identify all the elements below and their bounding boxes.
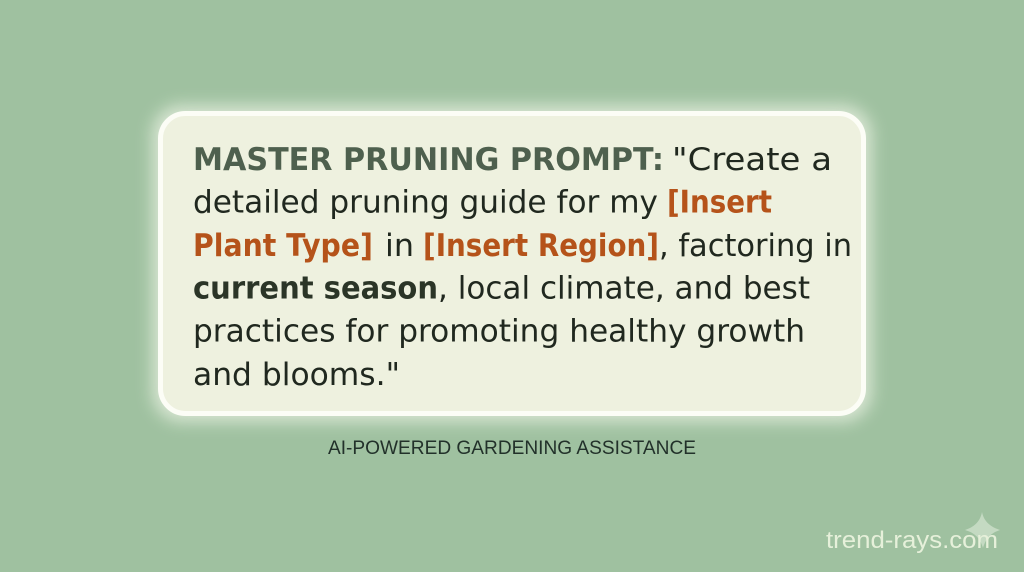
prompt text: and blooms." bbox=[193, 357, 400, 393]
prompt text: detailed pruning guide for my bbox=[193, 184, 658, 220]
prompt text: Plant Type] bbox=[193, 228, 373, 264]
caption: AI-POWERED GARDENING ASSISTANCE bbox=[328, 438, 696, 459]
prompt text: current season bbox=[193, 270, 438, 306]
prompt text: [Insert Region] bbox=[423, 228, 659, 264]
prompt card bbox=[160, 114, 864, 414]
prompt text: "Create a bbox=[672, 142, 832, 178]
prompt text: practices for promoting healthy growth bbox=[193, 314, 805, 350]
prompt text: in bbox=[385, 228, 414, 264]
prompt heading: MASTER PRUNING PROMPT: bbox=[193, 142, 664, 178]
prompt text bbox=[193, 142, 852, 393]
prompt text: [Insert bbox=[667, 184, 772, 220]
watermark: trend-rays.com bbox=[826, 527, 998, 554]
prompt text: , local climate, and best bbox=[438, 270, 810, 306]
prompt text: , factoring in bbox=[659, 228, 852, 264]
icon: sparkle bbox=[965, 512, 1000, 548]
card glow bbox=[152, 105, 872, 422]
